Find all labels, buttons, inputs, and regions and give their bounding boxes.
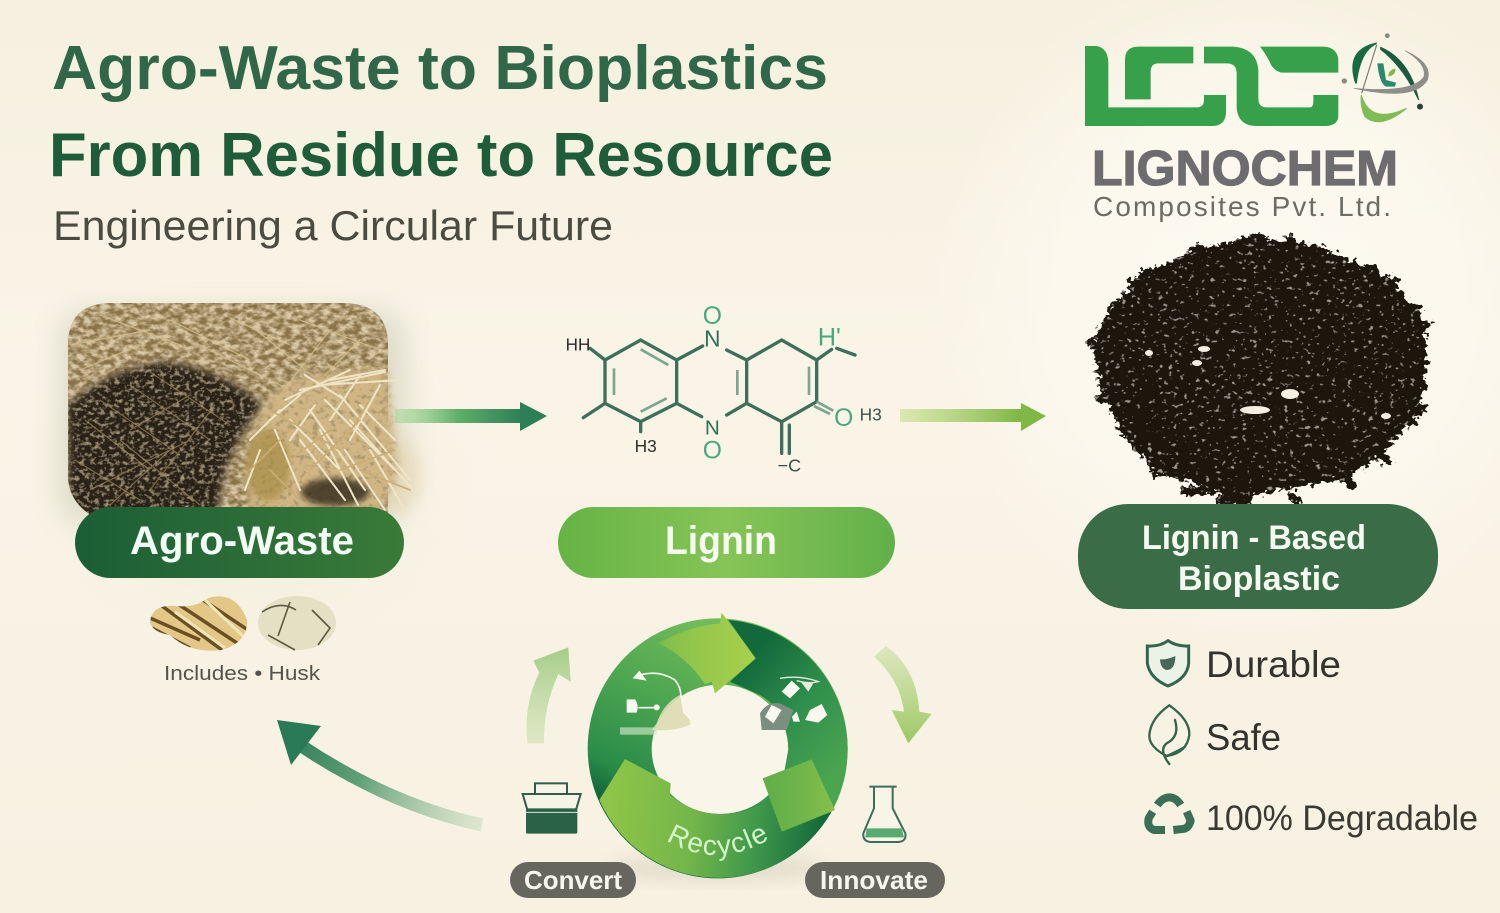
- atom: right hydrogen: H': [818, 323, 841, 351]
- button: innovate: Innovate: [820, 865, 928, 895]
- company suffix: Composites Pvt. Ltd.: [1093, 191, 1391, 222]
- company name: LIGNOCHEM: [1092, 142, 1398, 196]
- dark mound: [68, 362, 262, 520]
- label: agro-waste pill: [75, 507, 404, 578]
- background glow behind photo: [0, 260, 500, 680]
- label: lignin pill: [558, 507, 895, 578]
- icon: shield: [1147, 641, 1189, 686]
- list: properties: [1147, 641, 1478, 838]
- icon: briefcase: [523, 783, 581, 834]
- label: H3 lower left: H3: [635, 436, 657, 456]
- sample: straw fibres: [150, 596, 247, 651]
- image: black bioplastic granules: [1092, 236, 1427, 502]
- caption: includes husk: Includes • Husk: [164, 663, 321, 685]
- logo mark letters: [1085, 46, 1338, 126]
- label: agro-waste pill: Agro-Waste: [130, 519, 354, 563]
- pill line two: Bioplastic: [1178, 560, 1340, 598]
- ring centre: [648, 678, 792, 821]
- recycle ring: Recycle: [668, 824, 767, 861]
- subtitle: Engineering a Circular Future: [53, 202, 613, 249]
- logo: [1085, 33, 1428, 222]
- granule gaps: [1145, 346, 1391, 419]
- text: durable: Durable: [1206, 644, 1341, 685]
- recycle ring: [588, 612, 848, 878]
- atom: bottom nitrogen: N: [705, 417, 720, 440]
- arrow: lignin to bioplastic: [900, 403, 1046, 431]
- button: convert: Convert: [524, 865, 622, 895]
- shadow under ring: [608, 854, 828, 882]
- label: bioplastic pill: [1078, 504, 1438, 609]
- title: From Residue to Resource: [49, 121, 833, 190]
- chevron right: [763, 759, 835, 832]
- arrow: curved up: [527, 647, 571, 743]
- label: H3 right: H3: [860, 405, 882, 425]
- title: [49, 34, 833, 190]
- text: safe: Safe: [1206, 717, 1281, 758]
- chevron top: [658, 613, 756, 693]
- label: lignin pill: Lignin: [665, 519, 777, 563]
- sample: husk: [258, 596, 336, 650]
- text: degradable: 100% Degradable: [1206, 799, 1478, 838]
- button: innovate: [805, 862, 945, 898]
- background glow behind granules: [928, 0, 1500, 640]
- title: Agro-Waste to Bioplastics: [52, 34, 828, 103]
- logo emblem: [1342, 33, 1428, 122]
- pill line one: Lignin - Based: [1142, 519, 1366, 557]
- atom: bottom oxygen: O: [703, 437, 722, 464]
- label: HH: HH: [566, 335, 590, 355]
- cycle diagram: [510, 612, 945, 898]
- chemical structure: lignin: [566, 303, 882, 475]
- ring right dark section: [728, 620, 848, 812]
- atom: top oxygen: O: [703, 303, 722, 330]
- icon: flask: [863, 787, 906, 842]
- icon: recycle: [1148, 797, 1191, 830]
- panel: agro-waste photo: [60, 303, 422, 525]
- ring bottom band: [599, 759, 832, 878]
- button: convert: [510, 862, 636, 898]
- atom: top nitrogen: N: [704, 326, 721, 352]
- label: C: −C: [778, 455, 801, 475]
- pale straw bundle: [245, 368, 422, 511]
- icon: recycled flakes: [760, 677, 827, 730]
- icon: leaf: [1149, 705, 1189, 764]
- text: recycle on ring: [666, 837, 773, 855]
- atom: right oxygen: O: [834, 405, 853, 432]
- icon: plastic process: [620, 671, 690, 735]
- arrow: return to agro-waste: [277, 720, 482, 825]
- arrow: waste to lignin: [395, 402, 547, 431]
- ring base left: [588, 618, 848, 878]
- arrow: curved down: [874, 646, 932, 743]
